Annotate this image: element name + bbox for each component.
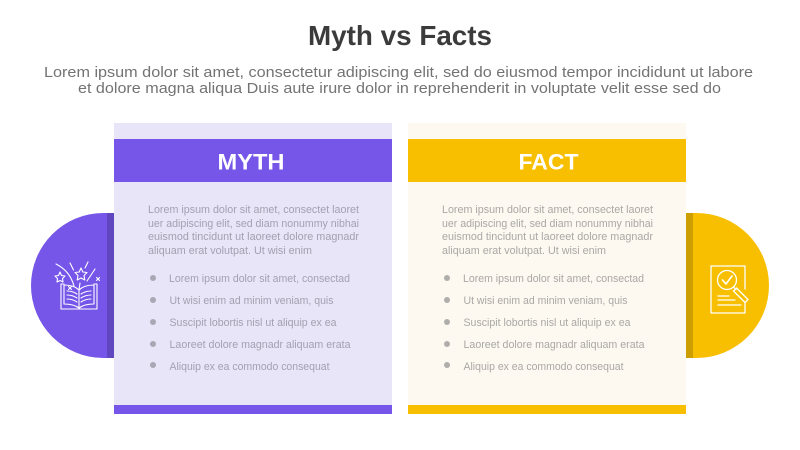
- subtitle text block: Lorem ipsum dolor sit amet, consectetur adipiscing elit, sed do eiusmod tempor incididunt ut labore: [44, 64, 753, 81]
- title: Myth vs Facts: [308, 20, 492, 51]
- myth paragraph: Lorem ipsum dolor sit amet, consectet laoret: [148, 204, 359, 216]
- fact paragraph: aliquam erat volutpat. Ut wisi enim: [442, 245, 606, 257]
- fact paragraph: [442, 204, 653, 257]
- myth bullet list: [150, 273, 351, 373]
- fact heading: FACT: [518, 150, 579, 174]
- myth paragraph: uer adipiscing elit, sed diam nonummy nibhai: [148, 218, 359, 230]
- myth bullet list: Aliquip ex ea commodo consequat: [170, 361, 330, 373]
- fact semicircle tab: [686, 213, 769, 358]
- myth paragraph: [148, 204, 359, 257]
- myth bottom bar: [114, 405, 392, 414]
- myth bullet list: Lorem ipsum dolor sit amet, consectad: [169, 273, 350, 285]
- fact bullet list: Suscipit lobortis nisl ut aliquip ex ea: [464, 317, 631, 329]
- myth semicircle tab: [31, 213, 114, 358]
- fact bottom bar: [408, 405, 686, 414]
- myth heading: MYTH: [218, 150, 284, 174]
- fact bullet list: Aliquip ex ea commodo consequat: [464, 361, 624, 373]
- fact bullet list: Laoreet dolore magnadr aliquam erata: [464, 339, 645, 351]
- fact header bar: [408, 139, 686, 182]
- myth header bar: [114, 139, 392, 182]
- fact panel background: [408, 123, 686, 414]
- myth bullet list: Laoreet dolore magnadr aliquam erata: [170, 339, 351, 351]
- myth panel background: [114, 123, 392, 414]
- fact bullet list: [444, 273, 645, 373]
- myth bullet list: Ut wisi enim ad minim veniam, quis: [170, 295, 334, 307]
- fact bullet list: Lorem ipsum dolor sit amet, consectad: [463, 273, 644, 285]
- subtitle text block: [44, 64, 753, 97]
- panel: myth: [114, 123, 392, 414]
- icon: open book with stars: [55, 262, 100, 309]
- myth bullet list: Suscipit lobortis nisl ut aliquip ex ea: [170, 317, 337, 329]
- myth paragraph: euismod tincidunt ut laoreet dolore magnadr: [148, 231, 359, 243]
- subtitle text block: et dolore magna aliqua Duis aute irure dolor in reprehenderit in voluptate velit esse sed do: [78, 80, 721, 97]
- fact paragraph: Lorem ipsum dolor sit amet, consectet laoret: [442, 204, 653, 216]
- fact paragraph: uer adipiscing elit, sed diam nonummy nibhai: [442, 218, 653, 230]
- myth paragraph: aliquam erat volutpat. Ut wisi enim: [148, 245, 312, 257]
- fact paragraph: euismod tincidunt ut laoreet dolore magnadr: [442, 231, 653, 243]
- icon: document with magnifier check: [711, 266, 748, 313]
- fact bullet list: Ut wisi enim ad minim veniam, quis: [464, 295, 628, 307]
- panel: fact: [408, 123, 686, 414]
